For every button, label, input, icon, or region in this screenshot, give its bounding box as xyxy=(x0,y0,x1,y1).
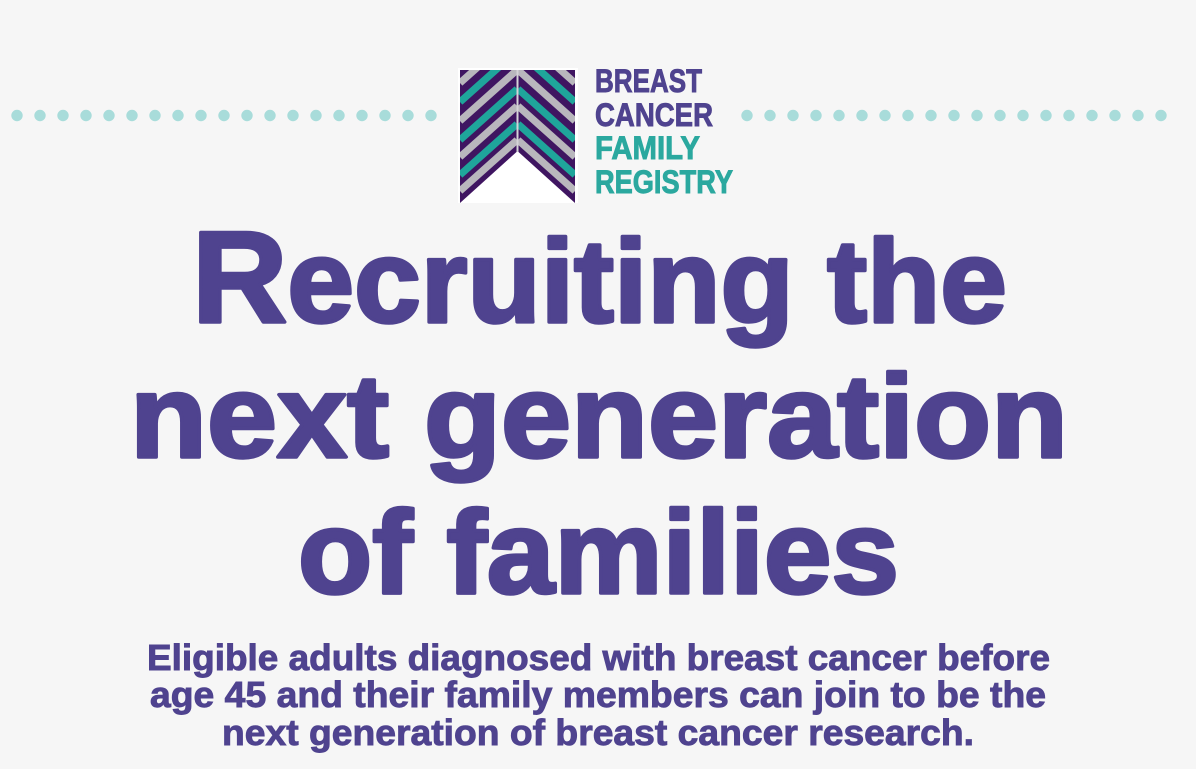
subtitle text xyxy=(147,637,1050,753)
dotted line: left xyxy=(11,110,437,121)
subtitle text: Eligible adults diagnosed with breast cancer before xyxy=(147,637,1050,678)
logo: wordmark: FAMILY xyxy=(595,130,700,166)
logo: wordmark: REGISTRY xyxy=(595,164,733,200)
logo: wordmark: CANCER xyxy=(595,97,713,133)
title: next generation xyxy=(130,351,1068,483)
logo: wordmark: BREAST xyxy=(595,63,702,99)
logo: wordmark xyxy=(595,63,733,200)
dotted line: right xyxy=(741,110,1167,121)
subtitle text: age 45 and their family members can join to be the xyxy=(150,674,1046,715)
subtitle text: next generation of breast cancer research. xyxy=(222,712,974,753)
title: of families xyxy=(298,487,899,619)
title xyxy=(130,204,1068,619)
logo: chevron ribbon icon xyxy=(458,68,578,203)
title: Recruiting the xyxy=(192,204,1007,350)
